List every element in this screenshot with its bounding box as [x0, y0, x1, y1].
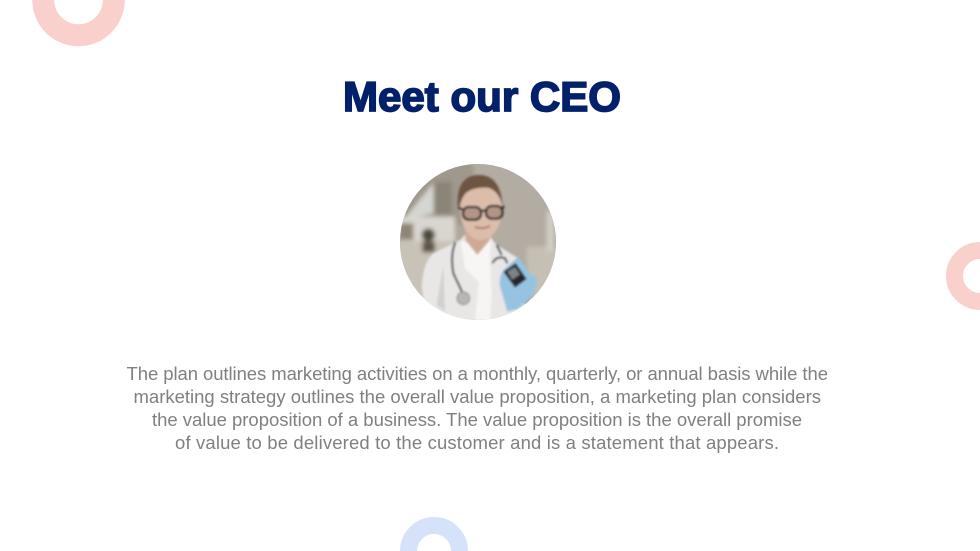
body text: [126, 363, 828, 453]
title: Meet our CEO: [343, 73, 621, 120]
mouth: [475, 226, 490, 228]
portrait photo: [400, 164, 556, 320]
room background: [400, 164, 556, 320]
glucose meter: [503, 263, 527, 288]
white coat: [422, 175, 537, 322]
text line 2: marketing strategy outlines the overall value proposition, a marketing plan considers: [134, 386, 821, 407]
glasses: [459, 206, 504, 220]
text line 3: the value proposition of a business. The value proposition is the overall promise: [152, 409, 802, 430]
decorative ring: bottom: [408, 526, 460, 551]
text line 1: The plan outlines marketing activities on a monthly, quarterly, or annual basis while the: [126, 363, 828, 384]
neck and face: [464, 230, 491, 256]
text line 4: of value to be delivered to the customer and is a statement that appears.: [175, 432, 779, 453]
stethoscope: [452, 242, 507, 292]
hair: [458, 175, 503, 210]
blue glove: [500, 257, 537, 312]
decorative ring: top left: [43, 0, 114, 35]
decorative ring: right: [954, 250, 980, 302]
